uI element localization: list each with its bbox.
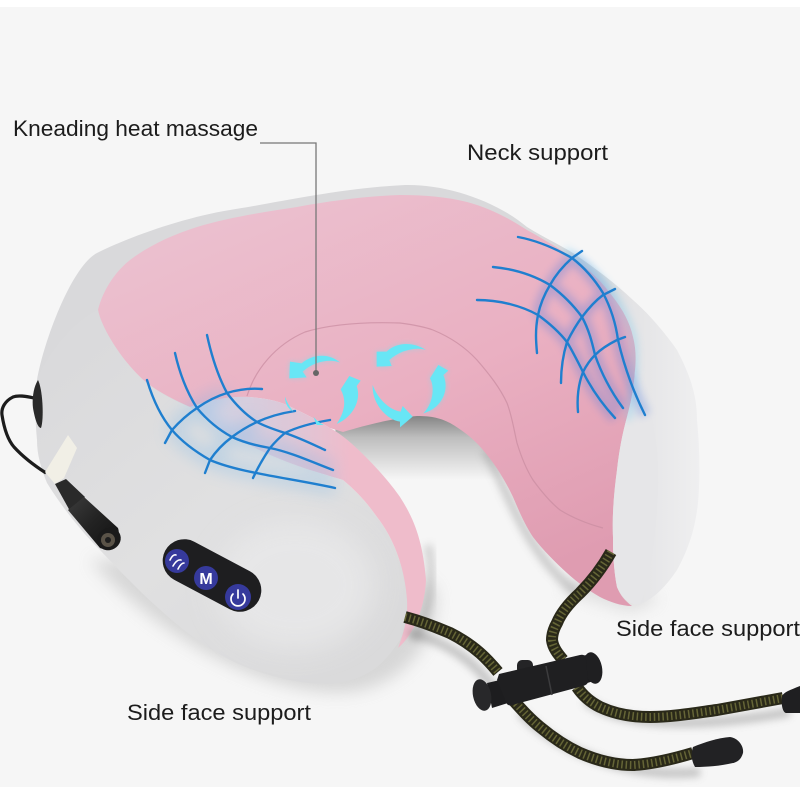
massage mesh left <box>147 335 335 488</box>
label: side face support left: Side face support <box>127 700 311 725</box>
center hole shading <box>335 410 578 640</box>
neck recess outline <box>247 323 603 528</box>
blue mesh glow left <box>172 393 335 488</box>
left arm gray front <box>36 310 407 684</box>
rope end cap right <box>782 686 800 713</box>
pillow gray back and right flap <box>37 185 699 604</box>
pillow shadows <box>90 560 660 693</box>
right flap inner edge <box>613 370 658 604</box>
label: neck support: Neck support <box>467 140 608 165</box>
drawstring ropes <box>405 552 783 765</box>
rope end cap bottom <box>692 737 743 767</box>
label: kneading heat massage: Kneading heat massage <box>13 116 258 141</box>
cyan edge glow right <box>565 250 634 420</box>
button: mode: M <box>199 571 213 588</box>
massage mesh right <box>477 237 645 418</box>
left arm pink stripe <box>190 397 426 648</box>
cord lock toggle <box>470 650 605 713</box>
button: heat <box>165 549 189 573</box>
button: power <box>225 584 251 610</box>
pillow pink inner surface <box>98 195 636 606</box>
icon: DC plug <box>55 479 125 555</box>
callout: leader line for kneading heat massage <box>260 143 319 376</box>
rope shadows <box>408 632 790 773</box>
blue mesh glow right <box>538 258 645 418</box>
icon: white cable tag <box>45 435 77 484</box>
icon: power cable <box>2 380 46 473</box>
soft highlight <box>215 520 375 650</box>
control panel <box>155 532 269 619</box>
label: side face support right: Side face support <box>616 616 800 641</box>
icon: kneading rotation arrows <box>285 344 448 427</box>
